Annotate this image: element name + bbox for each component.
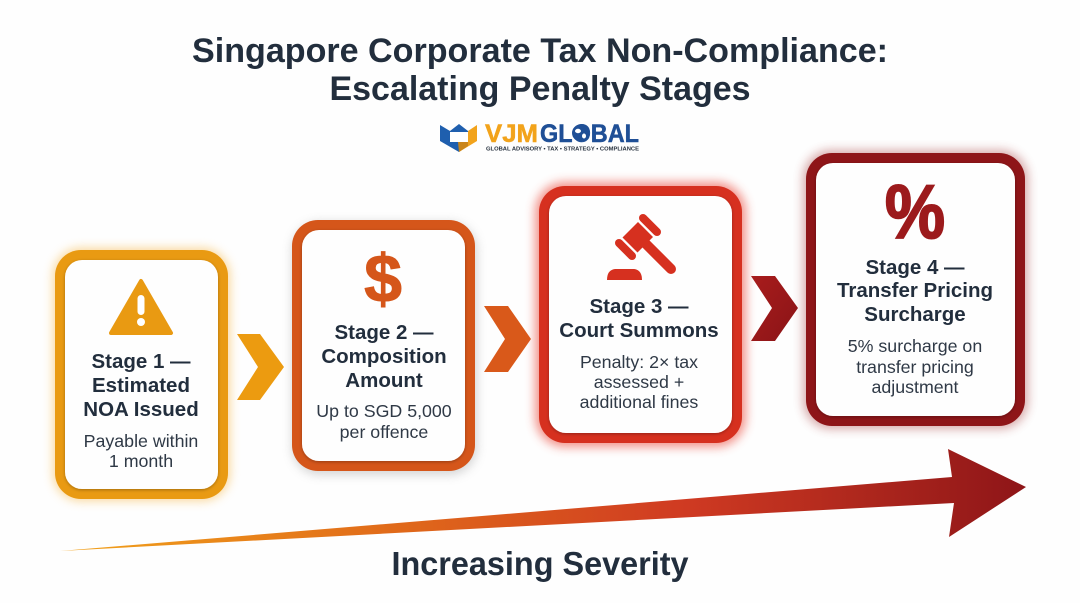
arrow: stage 3 to 4 [751,276,798,341]
heading: Amount [345,369,423,392]
heading: Surcharge [864,303,966,326]
body text: Payable within [84,431,198,451]
heading: Composition [321,345,447,368]
title: Escalating Penalty Stages [330,70,750,108]
icon: warning triangle [111,281,171,333]
heading: Stage 3 — [589,295,689,318]
severity arrow [60,449,1026,551]
body text: 5% surcharge on [848,336,982,356]
body text: additional fines [580,392,698,412]
arrow: stage 1 to 2 [237,334,284,400]
body text: Penalty: 2× tax [580,352,698,372]
arrow: stage 2 to 3 [484,306,531,372]
heading: Stage 1 — [91,350,191,373]
logo: VJM Global [440,120,639,152]
heading: Stage 4 — [865,256,965,279]
panel: stage 3 [535,182,746,447]
icon: percent: % [885,170,945,255]
body text: adjustment [872,377,959,397]
icon: dollar: $ [364,241,402,317]
body text: 1 month [109,451,173,471]
heading: Stage 2 — [334,321,434,344]
body text: assessed + [594,372,684,392]
body text: transfer pricing [856,357,974,377]
logo wordmark [485,120,639,148]
logo wordmark: GLOBAL [540,120,639,148]
heading: Estimated [92,374,190,397]
heading: NOA Issued [83,398,199,421]
panel: stage 1 [53,248,230,501]
title: Singapore Corporate Tax Non-Compliance: [192,32,888,70]
icon: logo mark [440,124,477,152]
body text: per offence [340,422,428,442]
heading: Transfer Pricing [837,279,993,302]
logo wordmark: VJM [485,120,538,148]
panel: stage 2 [292,220,477,475]
body text: Up to SGD 5,000 [316,401,452,421]
panel: stage 4 [803,150,1028,429]
icon: gavel [607,218,671,280]
title [192,32,888,108]
severity label: Increasing Severity [392,545,689,582]
heading: Court Summons [559,319,719,342]
logo tagline: GLOBAL ADVISORY • TAX • STRATEGY • COMPLIANCE [486,146,639,152]
